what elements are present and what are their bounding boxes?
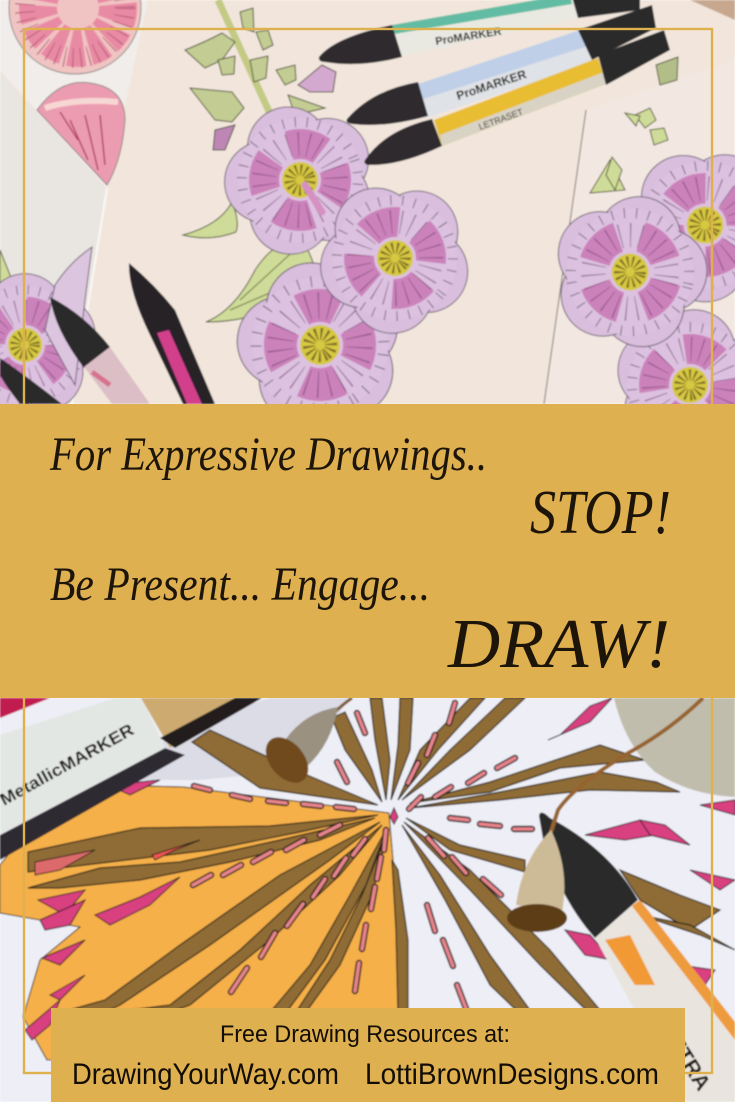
marker: green promarker: ProMARKER <box>435 26 502 48</box>
footer heading: Free Drawing Resources at: <box>220 1021 510 1048</box>
brown petal veins <box>28 698 735 1030</box>
black marker nib, right <box>539 812 638 938</box>
marker: green promarker <box>319 0 640 64</box>
marker: pale pink pen, bottom left <box>50 297 150 404</box>
orange marker body, bottom right: LETRA <box>656 1019 716 1095</box>
paper shadow under metallic marker <box>142 698 348 780</box>
pink flame shapes <box>25 698 735 1040</box>
glass jar <box>614 698 735 797</box>
marker: third black nib <box>0 358 62 404</box>
photo: poppy head and coloured flower <box>0 698 735 1102</box>
dried poppy head, left <box>264 698 354 783</box>
banner: gold quote panel <box>0 404 735 698</box>
orange marker body, bottom right <box>595 900 735 1102</box>
metallic marker, top left <box>0 698 262 860</box>
heading line: For Expressive Drawings: For Expressive Drawings.. <box>49 428 487 481</box>
footer panel: resources <box>51 1008 685 1102</box>
marker: blue promarker <box>347 5 656 125</box>
marker: black and pink pen, bottom left <box>129 263 215 404</box>
heading line: Be Present: Be Present... Engage... <box>50 558 430 611</box>
heading line: DRAW: DRAW! <box>447 606 670 683</box>
website: LottiBrownDesigns: LottiBrownDesigns.com <box>365 1058 659 1091</box>
hollyhock stem and buds <box>185 0 336 150</box>
heading line: STOP: STOP! <box>530 479 671 547</box>
marker: yellow promarker: LETRASET <box>477 106 525 132</box>
marker: yellow promarker <box>364 30 670 165</box>
photo: hollyhock drawings and markers <box>0 0 735 404</box>
leaves <box>0 57 678 322</box>
dried poppy head with stem, right <box>507 698 703 932</box>
background sheets of paper <box>0 0 735 404</box>
orange coloured flower fan <box>0 785 410 1060</box>
website: DrawingYourWay: DrawingYourWay.com <box>72 1058 339 1091</box>
pink dashes <box>193 703 532 1011</box>
marker: blue promarker: ProMARKER <box>455 67 528 103</box>
metallic marker, top left: MetallicMARKER <box>0 720 137 809</box>
pink flower sketch, top left <box>9 0 141 185</box>
flower sketches <box>0 84 735 470</box>
